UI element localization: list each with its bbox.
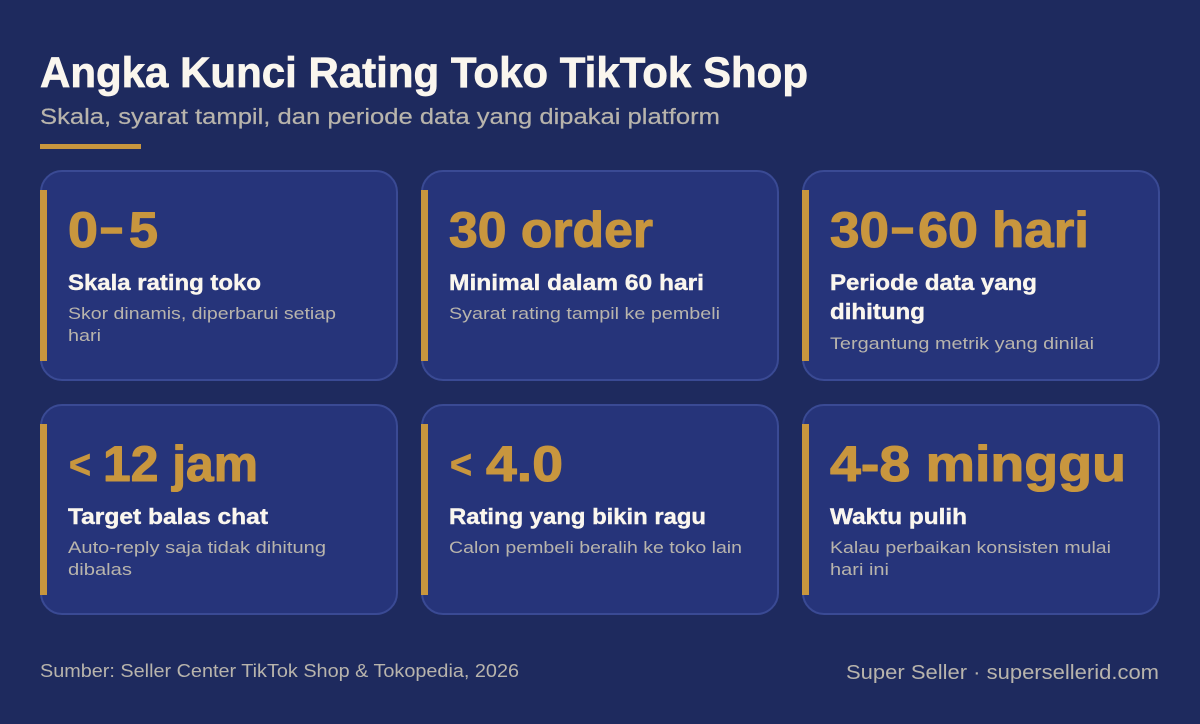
stat: 30-60 hari: hari <box>992 202 1089 258</box>
source note: Sumber: Seller Center TikTok Shop & Tokopedia, 2026 <box>40 661 519 681</box>
stat: under 4.0: 4.0 <box>486 436 563 492</box>
stat: under 12 jam: < <box>69 443 91 487</box>
stat: 30-60 hari: – <box>892 208 913 250</box>
stat: 30-60 hari: 60 <box>918 202 978 258</box>
panel: rating yang bikin ragu <box>421 405 778 614</box>
stat: under 4.0 <box>450 436 563 492</box>
panel: waktu pulih <box>802 405 1159 614</box>
heading: waktu pulih: Waktu pulih <box>830 504 967 529</box>
title: Angka Kunci Rating Toko TikTok Shop <box>40 49 808 97</box>
panel: skala rating <box>40 171 397 380</box>
stat: under 4.0: < <box>450 443 472 487</box>
description: tergantung metrik: Tergantung metrik yang dinilai <box>830 334 1094 353</box>
description: auto-reply: dibalas <box>68 560 132 579</box>
heading: minimal dalam 60 hari: Minimal dalam 60 hari <box>449 270 704 295</box>
description: auto-reply: Auto-reply saja tidak dihitung <box>68 538 326 557</box>
panel: target balas chat <box>40 405 397 614</box>
description: kalau perbaikan: Kalau perbaikan konsisten mulai <box>830 538 1111 557</box>
stat: under 12 jam: 12 jam <box>103 436 258 492</box>
stat: 4-8 minggu: 4-8 minggu <box>830 436 1126 492</box>
accent bar <box>40 144 141 149</box>
heading: target balas chat: Target balas chat <box>68 504 269 529</box>
stat: 0-5: 0 <box>68 202 98 258</box>
description: syarat rating: Syarat rating tampil ke pembeli <box>449 304 720 323</box>
panel: periode data <box>802 171 1159 380</box>
stat: 30-60 hari <box>830 202 1089 258</box>
panel: minimal order <box>421 171 778 380</box>
stat: 0-5: – <box>101 208 122 250</box>
stat: 30 order: 30 order <box>449 202 653 258</box>
description: skor dinamis <box>68 304 336 345</box>
stat: 0-5: 5 <box>129 202 158 258</box>
brand credit: Super Seller · supersellerid.com <box>846 662 1159 684</box>
heading: periode data yang dihitung: dihitung <box>830 299 925 324</box>
heading: rating yang bikin ragu: Rating yang bikin ragu <box>449 504 706 529</box>
description: skor dinamis: hari <box>68 326 101 345</box>
description: kalau perbaikan <box>830 538 1111 579</box>
heading: periode data yang dihitung: Periode data yang <box>830 270 1037 295</box>
stat: 30-60 hari: 30 <box>830 202 889 258</box>
description: calon pembeli: Calon pembeli beralih ke toko lain <box>449 538 742 557</box>
heading: periode data yang dihitung <box>830 270 1037 324</box>
description: auto-reply <box>68 538 326 579</box>
heading: skala rating toko: Skala rating toko <box>68 270 261 295</box>
stat: 0-5 <box>68 202 158 258</box>
description: skor dinamis: Skor dinamis, diperbarui setiap <box>68 304 336 323</box>
subtitle: Skala, syarat tampil, dan periode data yang dipakai platform <box>40 104 720 129</box>
description: kalau perbaikan: hari ini <box>830 560 889 579</box>
